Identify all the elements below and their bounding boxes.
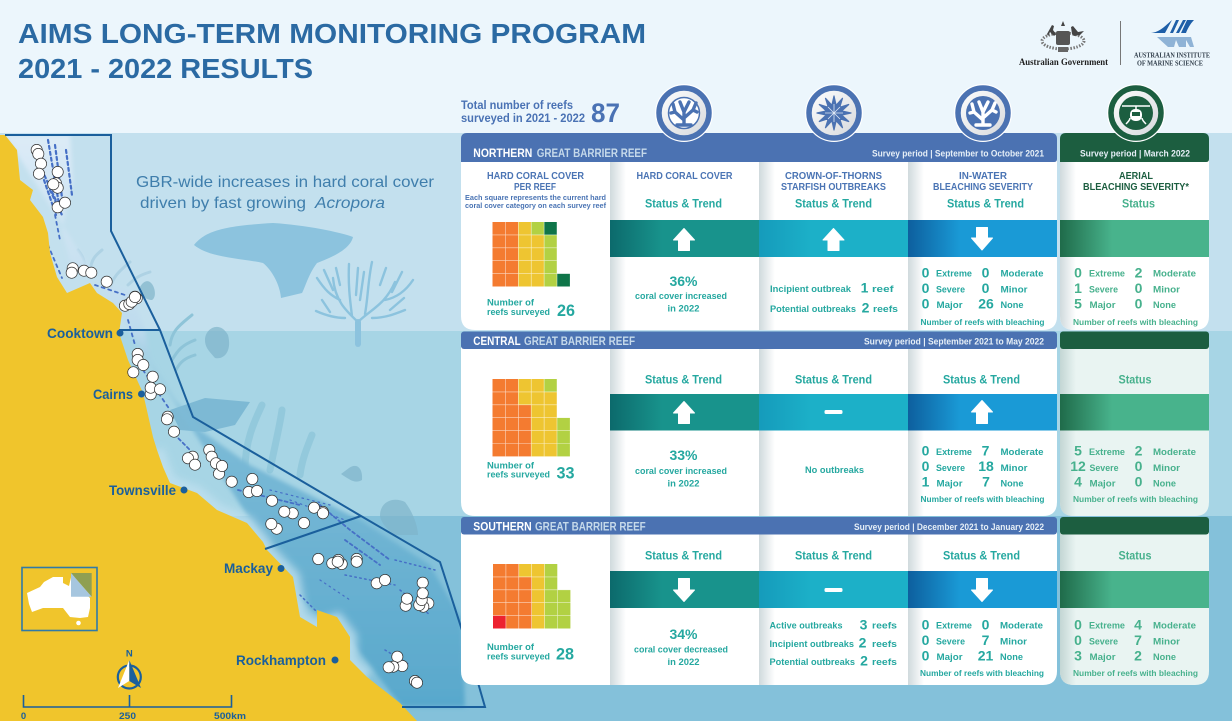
southern: in-water bleaching: Extreme bbox=[936, 620, 972, 632]
southern: aerial bleaching: Minor bbox=[1153, 636, 1180, 648]
southern: starfish outbreaks: reefs bbox=[872, 657, 897, 668]
southern: in-water bleaching: Major bbox=[936, 652, 963, 663]
northern: starfish outbreaks: reef bbox=[872, 284, 895, 295]
southern: in-water bleaching: 21 bbox=[978, 648, 993, 664]
label: Cooktown: Cooktown bbox=[47, 326, 113, 341]
northern: hard coral cover per reef: 26 bbox=[557, 301, 575, 320]
key message: GBR-wide increases in hard coral cover bbox=[136, 174, 435, 191]
central: in-water bleaching: 0 bbox=[922, 458, 930, 474]
central: hard coral cover per reef bbox=[487, 379, 574, 482]
northern: aerial bleaching: 0 bbox=[1135, 280, 1143, 296]
southern: hard coral cover per reef bbox=[487, 564, 574, 664]
header bar: northern: NORTHERN bbox=[473, 148, 532, 160]
central: hard coral cover status: in 2022 bbox=[668, 478, 700, 490]
arrow: central bleaching up bbox=[972, 400, 992, 424]
header bar: northern aerial bbox=[1060, 133, 1209, 162]
arrow: central coral up bbox=[674, 402, 694, 424]
central: in-water bleaching: Major bbox=[936, 478, 963, 490]
icon: crown-of-thorns starfish bbox=[805, 84, 863, 142]
central: in-water bleaching: 7 bbox=[982, 442, 990, 458]
northern: in-water bleaching: Minor bbox=[1000, 284, 1028, 296]
chart: southern reef squares bbox=[492, 564, 571, 628]
northern: aerial bleaching: Status bbox=[1122, 198, 1155, 210]
header bar: northern: GREAT BARRIER REEF bbox=[537, 148, 647, 160]
faint table coral in central band bbox=[170, 398, 250, 432]
icon: AIMS mark bbox=[1151, 20, 1194, 47]
southern: hard coral cover status: 34% bbox=[669, 626, 698, 642]
central: aerial bleaching: 12 bbox=[1070, 458, 1086, 474]
northern: in-water bleaching: Number of reefs with bleaching bbox=[920, 317, 1044, 327]
surveyed reef markers bbox=[31, 144, 434, 688]
southern: in-water bleaching: Severe bbox=[936, 636, 965, 648]
southern: starfish outbreaks: Active outbreaks bbox=[770, 620, 842, 632]
central: in-water bleaching: Moderate bbox=[1000, 447, 1044, 458]
central: aerial bleaching: Extreme bbox=[1089, 447, 1125, 458]
central: aerial bleaching: 0 bbox=[1135, 474, 1143, 490]
northern: aerial bleaching: 5 bbox=[1074, 296, 1082, 312]
northern: in-water bleaching: BLEACHING SEVERITY bbox=[933, 181, 1033, 193]
northern: hard coral cover per reef: PER REEF bbox=[514, 181, 556, 193]
central: hard coral cover per reef: Number of bbox=[487, 460, 535, 471]
northern: in-water bleaching: Extreme bbox=[936, 268, 972, 280]
northern: in-water bleaching: 0 bbox=[922, 264, 930, 280]
southern: aerial bleaching: 0 bbox=[1074, 616, 1082, 632]
northern: hard coral cover status: Status & Trend bbox=[645, 198, 722, 210]
scale bar bbox=[21, 695, 246, 721]
trend bands, central bbox=[610, 394, 1209, 430]
north arrow bbox=[118, 649, 141, 688]
arrow: north coral up bbox=[674, 228, 694, 250]
northern: aerial bleaching: 0 bbox=[1135, 296, 1143, 312]
northern: aerial bleaching: 1 bbox=[1074, 280, 1082, 296]
northern: in-water bleaching: 0 bbox=[982, 264, 990, 280]
logo: Australian Institute of Marine Science bbox=[1134, 20, 1210, 68]
southern: hard coral cover per reef: reefs surveyed bbox=[487, 651, 550, 662]
icon: hard coral bbox=[655, 84, 713, 142]
central: aerial bleaching: 0 bbox=[1135, 458, 1143, 474]
southern: in-water bleaching: 0 bbox=[922, 616, 930, 632]
inset map of Australia bbox=[22, 568, 97, 630]
central: aerial bleaching: Number of reefs with bleaching bbox=[1073, 494, 1198, 504]
southern: starfish outbreaks: 2 bbox=[859, 634, 867, 650]
northern: hard coral cover per reef bbox=[465, 170, 607, 320]
title: AIMS LONG-TERM MONITORING PROGRAM bbox=[18, 18, 646, 49]
central: hard coral cover per reef: reefs surveyed bbox=[487, 470, 550, 481]
central: aerial bleaching: Status bbox=[1118, 374, 1152, 386]
southern: in-water bleaching: Minor bbox=[1000, 636, 1027, 648]
southern: in-water bleaching: 0 bbox=[922, 632, 930, 648]
northern: in-water bleaching: Moderate bbox=[1000, 268, 1044, 280]
title: 2021 - 2022 RESULTS bbox=[18, 53, 313, 84]
central: aerial bleaching: Minor bbox=[1153, 463, 1180, 474]
southern: aerial bleaching: 3 bbox=[1074, 648, 1082, 664]
northern: in-water bleaching bbox=[920, 170, 1044, 327]
southern: aerial bleaching: Number of reefs with bleaching bbox=[1073, 668, 1198, 678]
northern: hard coral cover status bbox=[635, 170, 733, 314]
arrow: north bleaching down bbox=[972, 228, 992, 250]
panel: column bodies, northern bbox=[461, 160, 1209, 330]
northern: in-water bleaching: 26 bbox=[978, 296, 994, 312]
arrow: south coral down bbox=[674, 578, 694, 602]
northern: aerial bleaching: BLEACHING SEVERITY* bbox=[1083, 181, 1190, 193]
central: aerial bleaching bbox=[1070, 374, 1198, 504]
southern: aerial bleaching: 2 bbox=[1134, 648, 1142, 664]
northern: in-water bleaching: Major bbox=[936, 300, 963, 311]
southern: aerial bleaching: None bbox=[1153, 652, 1176, 663]
trend bands, southern bbox=[610, 571, 1209, 608]
northern: hard coral cover status: coral cover increased bbox=[635, 291, 727, 302]
southern: hard coral cover status: Status & Trend bbox=[645, 550, 722, 562]
northern: hard coral cover per reef: coral cover category on each survey reef bbox=[465, 201, 607, 210]
header bar: central: Survey period | September 2021 to May 2022 bbox=[864, 336, 1044, 346]
central: starfish outbreaks bbox=[795, 374, 872, 476]
central: in-water bleaching: 7 bbox=[982, 474, 990, 490]
southern: starfish outbreaks: 3 bbox=[860, 616, 868, 632]
header bar: southern aerial bbox=[1060, 517, 1209, 534]
northern: aerial bleaching: 2 bbox=[1135, 264, 1143, 280]
central: in-water bleaching: 0 bbox=[922, 442, 930, 458]
northern: hard coral cover per reef: HARD CORAL COVER bbox=[487, 170, 584, 182]
northern: starfish outbreaks: Potential outbreaks bbox=[770, 304, 856, 315]
icon: in-water bleaching coral bbox=[954, 84, 1012, 142]
place labels bbox=[47, 326, 338, 668]
decorative coral silhouettes bbox=[78, 223, 418, 535]
key message: Acropora bbox=[314, 195, 385, 212]
southern: starfish outbreaks: Status & Trend bbox=[795, 550, 872, 562]
southern: starfish outbreaks bbox=[770, 550, 897, 668]
header bar: central: GREAT BARRIER REEF bbox=[524, 336, 635, 348]
reef region boundaries bbox=[5, 135, 485, 707]
northern: starfish outbreaks: CROWN-OF-THORNS bbox=[785, 170, 882, 182]
header bar: northern bbox=[461, 133, 1057, 162]
faint corals near north coast bbox=[78, 250, 195, 370]
southern: starfish outbreaks: reefs bbox=[872, 620, 897, 632]
dash: central starfish steady bbox=[825, 410, 842, 414]
northern: hard coral cover status: HARD CORAL COVER bbox=[636, 170, 733, 182]
header bar: southern: GREAT BARRIER REEF bbox=[535, 522, 646, 534]
southern: aerial bleaching: Major bbox=[1090, 652, 1116, 663]
central: aerial bleaching: Severe bbox=[1090, 463, 1118, 474]
icon: aerial survey helicopter bbox=[1107, 84, 1165, 142]
trend bands, northern bbox=[610, 220, 1209, 257]
northern: aerial bleaching: Major bbox=[1090, 300, 1116, 311]
central: in-water bleaching: 1 bbox=[922, 474, 930, 490]
northern: aerial bleaching: Number of reefs with bleaching bbox=[1073, 317, 1198, 327]
central: starfish outbreaks: No outbreaks bbox=[805, 465, 864, 476]
label: Cairns: Cairns bbox=[93, 387, 133, 402]
central: aerial bleaching: 2 bbox=[1135, 442, 1143, 458]
northern: starfish outbreaks: reefs bbox=[873, 304, 898, 315]
total reefs surveyed: surveyed in 2021 - 2022 bbox=[461, 113, 585, 125]
key message: driven by fast growing bbox=[140, 195, 306, 212]
key message bbox=[136, 174, 435, 212]
dash: south starfish steady bbox=[825, 588, 842, 592]
southern: in-water bleaching bbox=[920, 550, 1044, 678]
southern: hard coral cover per reef: 28 bbox=[556, 644, 574, 664]
southern: in-water bleaching: Number of reefs with bleaching bbox=[920, 668, 1044, 678]
label: Mackay: Mackay bbox=[224, 561, 273, 576]
northern: aerial bleaching: Extreme bbox=[1089, 268, 1125, 280]
southern: aerial bleaching bbox=[1073, 550, 1198, 678]
central: in-water bleaching: Status & Trend bbox=[943, 374, 1020, 386]
southern: hard coral cover status: in 2022 bbox=[668, 657, 700, 668]
central: aerial bleaching: None bbox=[1153, 478, 1176, 490]
southern: aerial bleaching: Extreme bbox=[1089, 620, 1125, 632]
southern: starfish outbreaks: reefs bbox=[872, 639, 897, 650]
southern: in-water bleaching: Moderate bbox=[1000, 620, 1043, 632]
southern: in-water bleaching: Status & Trend bbox=[943, 550, 1020, 562]
southern: aerial bleaching: Moderate bbox=[1153, 620, 1196, 632]
divider between logos bbox=[1120, 21, 1121, 65]
central: aerial bleaching: 5 bbox=[1074, 442, 1082, 458]
background: northern sea band bbox=[0, 133, 1232, 331]
southern: aerial bleaching: Severe bbox=[1089, 636, 1118, 648]
northern: hard coral cover per reef: Each square represents the current hard bbox=[465, 193, 606, 202]
northern: aerial bleaching: 0 bbox=[1074, 264, 1082, 280]
icon: coat of arms bbox=[1042, 21, 1084, 52]
southern: starfish outbreaks: 2 bbox=[860, 652, 868, 668]
mainland Queensland coast bbox=[0, 135, 417, 721]
header bar: central bbox=[461, 332, 1057, 349]
northern: aerial bleaching: Minor bbox=[1153, 284, 1180, 296]
header bar: central aerial bbox=[1060, 332, 1209, 349]
central: aerial bleaching: Moderate bbox=[1153, 447, 1196, 458]
northern: hard coral cover status: 36% bbox=[669, 273, 698, 289]
central: aerial bleaching: 4 bbox=[1074, 474, 1082, 490]
southern: aerial bleaching: 0 bbox=[1074, 632, 1082, 648]
arrow: north starfish up bbox=[823, 228, 844, 250]
southern: hard coral cover per reef: Number of bbox=[487, 642, 535, 653]
northern: starfish outbreaks: Status & Trend bbox=[795, 198, 872, 210]
northern: aerial bleaching: Moderate bbox=[1153, 268, 1196, 280]
northern: starfish outbreaks: STARFISH OUTBREAKS bbox=[781, 181, 886, 193]
northern: aerial bleaching: AERIAL bbox=[1119, 170, 1154, 182]
central: in-water bleaching: Extreme bbox=[936, 447, 972, 458]
southern: aerial bleaching: Status bbox=[1118, 550, 1152, 562]
northern: hard coral cover status: in 2022 bbox=[668, 304, 700, 314]
central: in-water bleaching: Number of reefs with bleaching bbox=[920, 494, 1044, 504]
header bar: northern aerial: Survey period | March 2022 bbox=[1080, 148, 1190, 158]
northern: hard coral cover per reef: reefs surveyed bbox=[487, 307, 550, 318]
header bar: central: CENTRAL bbox=[473, 336, 521, 348]
northern: in-water bleaching: 0 bbox=[922, 280, 930, 296]
central: hard coral cover per reef: 33 bbox=[556, 464, 574, 482]
reef patches bbox=[42, 140, 435, 665]
southern: starfish outbreaks: Incipient outbreaks bbox=[770, 639, 854, 650]
logo: Australian Government: Australian Government bbox=[1019, 57, 1108, 67]
northern: aerial bleaching: None bbox=[1153, 300, 1176, 311]
background: southern sea band bbox=[0, 516, 1232, 721]
panel: column bodies, central bbox=[461, 347, 1209, 516]
central: hard coral cover status: Status & Trend bbox=[645, 374, 722, 386]
central: in-water bleaching: None bbox=[1000, 478, 1024, 490]
northern: starfish outbreaks: 2 bbox=[862, 300, 870, 316]
northern: hard coral cover per reef: Number of bbox=[487, 298, 535, 308]
northern: starfish outbreaks bbox=[770, 170, 898, 316]
header bar: southern: Survey period | December 2021 to January 2022 bbox=[854, 522, 1044, 532]
faint corals in central waters bbox=[245, 405, 312, 475]
title bbox=[18, 18, 646, 84]
southern: in-water bleaching: 0 bbox=[982, 616, 990, 632]
northern: in-water bleaching: Status & Trend bbox=[947, 198, 1024, 210]
central: in-water bleaching: Severe bbox=[936, 463, 965, 474]
northern: aerial bleaching bbox=[1073, 170, 1198, 327]
southern: aerial bleaching: 7 bbox=[1134, 632, 1142, 648]
branching coral silhouette bbox=[316, 262, 413, 344]
northern: in-water bleaching: None bbox=[1000, 300, 1024, 311]
total reefs surveyed: Total number of reefs bbox=[461, 100, 573, 112]
southern: hard coral cover status: coral cover decreased bbox=[634, 644, 728, 656]
southern: starfish outbreaks: Potential outbreaks bbox=[770, 657, 855, 668]
table coral silhouette bbox=[194, 223, 353, 298]
total reefs surveyed bbox=[461, 98, 620, 128]
northern: aerial bleaching: Severe bbox=[1089, 284, 1118, 296]
southern: hard coral cover status bbox=[634, 550, 728, 668]
central: in-water bleaching: 18 bbox=[978, 458, 994, 474]
header bar: southern: SOUTHERN bbox=[473, 522, 532, 534]
northern: starfish outbreaks: 1 bbox=[861, 280, 869, 296]
southern: in-water bleaching: 0 bbox=[922, 648, 930, 664]
northern: in-water bleaching: 0 bbox=[982, 280, 990, 296]
north arrow: N bbox=[126, 649, 133, 660]
header bar: northern: Survey period | September to October 2021 bbox=[872, 148, 1044, 158]
logo: Australian Institute of Marine Science: AUSTRALIAN INSTITUTE bbox=[1134, 50, 1210, 60]
northern: in-water bleaching: Severe bbox=[936, 284, 965, 296]
southern: in-water bleaching: 7 bbox=[982, 632, 990, 648]
northern: starfish outbreaks: Incipient outbreak bbox=[770, 284, 852, 295]
coastal light halo bbox=[157, 450, 367, 677]
header bar: southern bbox=[461, 517, 1057, 534]
background: sky bbox=[0, 0, 1232, 134]
central: hard coral cover status bbox=[635, 374, 727, 490]
background: central sea band bbox=[0, 331, 1232, 517]
southern: aerial bleaching: 4 bbox=[1134, 616, 1142, 632]
trend arrows bbox=[674, 228, 992, 602]
logo: Australian Government bbox=[1019, 21, 1108, 67]
northern: in-water bleaching: IN-WATER bbox=[959, 170, 1007, 182]
arrow: south bleaching down bbox=[972, 578, 992, 602]
continental shelf shallows bbox=[5, 135, 465, 707]
faint fish silhouettes bbox=[140, 281, 418, 535]
southern: in-water bleaching: None bbox=[1000, 652, 1023, 663]
central: hard coral cover status: coral cover increased bbox=[635, 466, 727, 477]
northern: in-water bleaching: 0 bbox=[922, 296, 930, 312]
chart: northern reef squares bbox=[492, 222, 570, 286]
total reefs surveyed: 87 bbox=[591, 98, 620, 128]
central: aerial bleaching: Major bbox=[1090, 478, 1116, 490]
chart: central reef squares bbox=[492, 379, 570, 456]
central: hard coral cover status: 33% bbox=[669, 447, 698, 463]
label: Townsville: Townsville bbox=[109, 483, 176, 498]
central: starfish outbreaks: Status & Trend bbox=[795, 374, 872, 386]
label: Rockhampton: Rockhampton bbox=[236, 653, 326, 668]
central: in-water bleaching: Minor bbox=[1000, 463, 1028, 474]
central: in-water bleaching bbox=[920, 374, 1044, 504]
panel: column bodies, southern bbox=[461, 532, 1209, 685]
logo: Australian Institute of Marine Science: OF MARINE SCIENCE bbox=[1137, 58, 1203, 68]
